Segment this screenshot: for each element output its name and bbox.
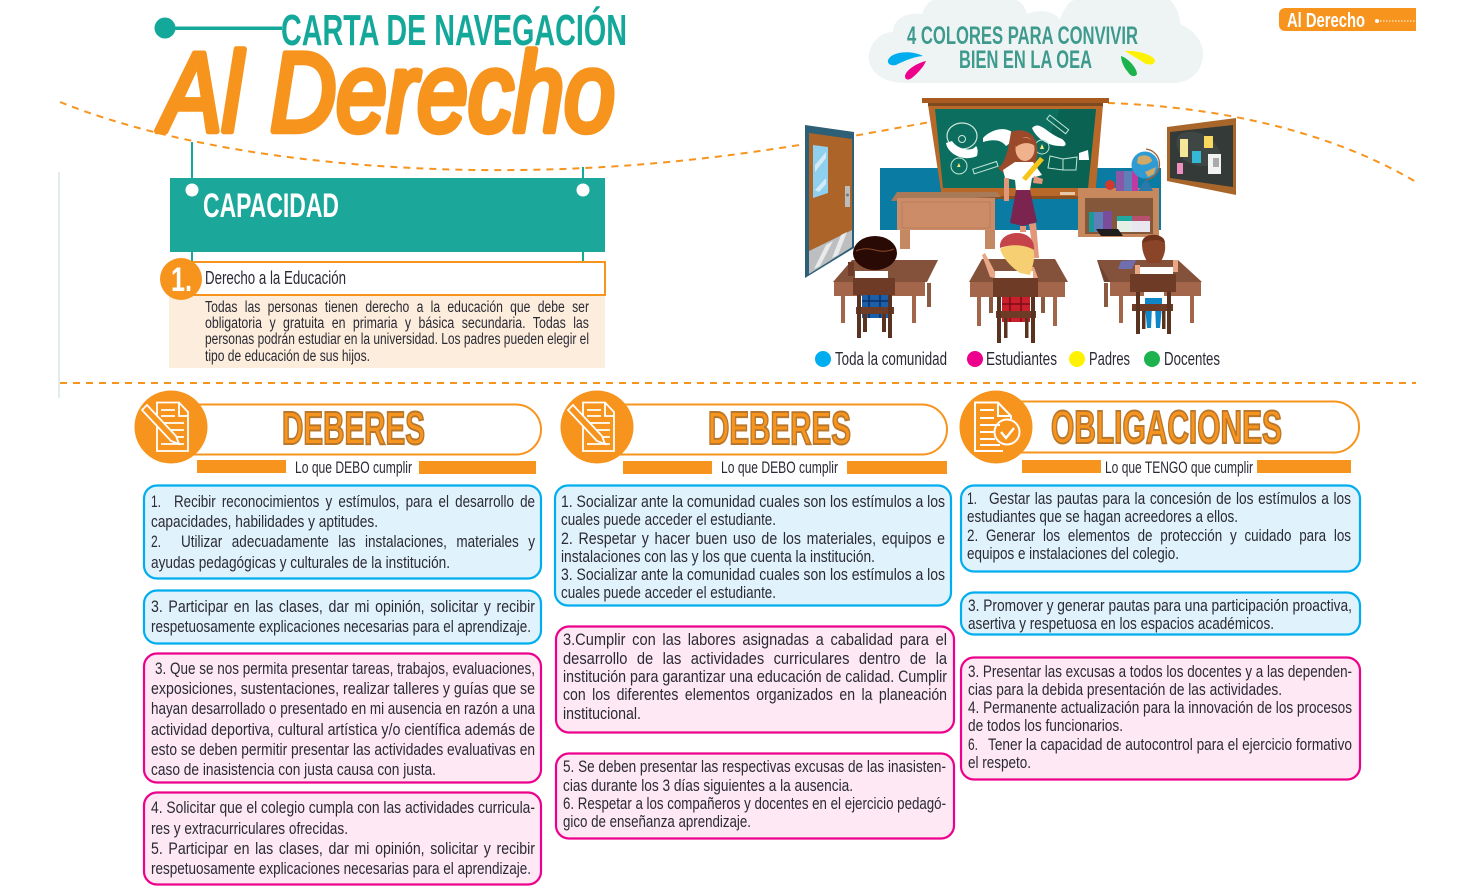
legend: Estudiantes xyxy=(986,349,1057,369)
icon: teacher xyxy=(998,130,1044,258)
callout: column 2 blue box duties 1-3: cuales puede acceder el estudiante. xyxy=(561,511,776,529)
tag: al derecho: Al Derecho xyxy=(1287,10,1365,32)
callout: column 1 pink box right 3 continued: exposiciones, sustentaciones, realizar talleres y guías que se xyxy=(151,680,535,698)
legend: Toda la comunidad xyxy=(835,349,947,369)
callout: column 1 blue box rights 1-2 xyxy=(144,486,541,578)
callout: column 1 pink box right 3 continued: hayan desarrollado o presentado en mi ausencia en razón a una xyxy=(151,700,536,718)
callout: column 2 pink box duties 5-6: 5. Se deben presentar las respectivas excusas de las inasisten- xyxy=(563,758,946,776)
callout: column 1 pink box right 3 continued: caso de inasistencia con justa causa con justa. xyxy=(151,761,436,779)
callout: column 3 pink box obligations 3-6: 6. xyxy=(968,736,978,754)
callout: column 1 blue box right 3 xyxy=(144,590,541,644)
callout: column 2 pink box duty 3: institucional. xyxy=(563,705,641,723)
legend xyxy=(815,349,1220,369)
legend: Docentes xyxy=(1164,349,1220,369)
callout: column 3 pink box obligations 3-6: el respeto. xyxy=(968,754,1031,772)
callout: column 2 blue box duties 1-3: instalaciones con las y los que cuenta la institución. xyxy=(561,548,875,566)
callout: column 1 blue box rights 1-2: 2. xyxy=(151,533,161,551)
callout: column 2 pink box duty 3 xyxy=(556,626,954,732)
callout: column 1 blue box right 3: 3. Participar en las clases, dar mi opinión, solicitar y recibir xyxy=(151,598,535,616)
illustration: classroom xyxy=(805,98,1236,343)
callout: column 2 pink box duty 3: institución para garantizar una educación de calidad. Cumplir xyxy=(563,668,947,686)
callout: column 2 pink box duty 3: 3.Cumplir con las labores asignadas a cabalidad para el xyxy=(563,631,947,649)
callout: column 1 pink box right 3 continued xyxy=(144,654,541,782)
icon: bookshelf and globe xyxy=(1078,149,1160,237)
callout: column 2 pink box duties 5-6: gico de enseñanza aprendizaje. xyxy=(563,813,751,831)
callout: column 2 pink box duties 5-6 xyxy=(556,754,954,838)
panel: capacidad: obligatoria y gratuita en primaria y básica secundaria. Todas las xyxy=(205,315,589,332)
callout: column 3 blue box obligation 3: 3. Promover y generar pautas para una participación proactiva, xyxy=(968,597,1352,615)
icon: teacher's desk xyxy=(891,192,1001,249)
callout: column 3 blue box obligations 1-2: 1. xyxy=(967,490,977,508)
panel heading: deberes column 2 xyxy=(560,390,947,477)
panel: capacidad: Derecho a la Educación xyxy=(205,268,346,288)
icon: chalkboard xyxy=(922,98,1109,199)
callout: column 3 pink box obligations 3-6: Tener la capacidad de autocontrol para el ejercicio formativo xyxy=(988,736,1352,754)
callout: column 2 blue box duties 1-3 xyxy=(555,486,951,606)
heading: 4 colores para convivir xyxy=(869,0,1203,83)
callout: column 1 pink box rights 4-5: res y extracurriculares ofrecidas. xyxy=(151,820,348,838)
heading: 4 colores para convivir: 4 COLORES PARA CONVIVIR xyxy=(907,22,1138,50)
panel heading: deberes column 1: Lo que DEBO cumplir xyxy=(295,459,412,477)
callout: column 3 blue box obligations 1-2: equipos e instalaciones del colegio. xyxy=(967,545,1179,563)
callout: column 2 pink box duties 5-6: cias durante los 3 días siguientes a la ausencia. xyxy=(563,777,853,795)
icon: document and pencil xyxy=(142,402,188,451)
panel: capacidad xyxy=(160,142,605,368)
title: carta de navegación al derecho xyxy=(154,5,627,155)
callout: column 3 pink box obligations 3-6: 4. Permanente actualización para la innovación de los procesos xyxy=(968,699,1352,717)
heading: 4 colores para convivir: BIEN EN LA OEA xyxy=(959,46,1092,74)
callout: column 3 blue box obligation 3 xyxy=(961,592,1360,634)
panel heading: deberes column 2: DEBERES xyxy=(708,402,851,454)
panel heading: obligaciones column 3: Lo que TENGO que cumplir xyxy=(1105,459,1253,477)
callout: column 3 pink box obligations 3-6: de todos los funcionarios. xyxy=(968,717,1123,735)
icon: document and pencil xyxy=(568,402,614,451)
panel heading: deberes column 2: Lo que DEBO cumplir xyxy=(721,459,838,477)
callout: column 1 blue box rights 1-2: Utilizar adecuadamente las instalaciones, materiales y xyxy=(181,533,536,551)
callout: column 3 pink box obligations 3-6: cias para la debida presentación de las actividades. xyxy=(968,681,1282,699)
panel heading: obligaciones column 3 xyxy=(960,390,1359,477)
callout: column 1 blue box right 3: respetuosamente explicaciones necesarias para el aprendizaje. xyxy=(151,618,531,636)
title: carta de navegación al derecho: CARTA DE NAVEGACIÓN xyxy=(281,5,627,55)
callout: column 1 pink box rights 4-5 xyxy=(144,792,541,884)
callout: column 2 blue box duties 1-3: 1. Socializar ante la comunidad cuales son los estímulos a los xyxy=(561,493,945,511)
callout: column 1 pink box rights 4-5: 5. Participar en las clases, dar mi opinión, solicitar y recibir xyxy=(151,840,535,858)
callout: column 1 blue box rights 1-2: Recibir reconocimientos y estímulos, para el desarrollo de xyxy=(174,493,535,511)
callout: column 1 blue box rights 1-2: 1. xyxy=(151,493,161,511)
callout: column 2 pink box duty 3: desarrollo de las actividades curriculares dentro de la xyxy=(563,650,948,668)
panel: capacidad: CAPACIDAD xyxy=(203,187,339,225)
callout: column 3 pink box obligations 3-6 xyxy=(961,658,1360,780)
callout: column 3 blue box obligations 1-2: 2. Generar los elementos de protección y cuidado para los xyxy=(967,527,1351,545)
title: carta de navegación al derecho: Al xyxy=(156,30,268,155)
callout: column 1 pink box right 3 continued: actividad deportiva, cultural artística y/o científica además de xyxy=(151,721,535,739)
callout: column 3 blue box obligations 1-2: Gestar las pautas para la concesión de los estímulos a los xyxy=(989,490,1351,508)
callout: column 1 blue box rights 1-2: capacidades, habilidades y aptitudes. xyxy=(151,513,378,531)
panel: capacidad: tipo de educación de sus hijos. xyxy=(205,348,370,365)
callout: column 3 blue box obligations 1-2 xyxy=(961,486,1360,572)
callout: column 2 blue box duties 1-3: 2. Respetar y hacer buen uso de los materiales, equipos e xyxy=(561,530,945,548)
callout: column 1 pink box right 3 continued: 3. Que se nos permita presentar tareas, trabajos, evaluaciones, xyxy=(155,660,535,678)
callout: column 3 blue box obligation 3: asertiva y respetuosa en los espacios académicos. xyxy=(968,615,1274,633)
panel heading: deberes column 1 xyxy=(134,390,541,477)
panel: capacidad: personas podrán estudiar en la universidad. Los padres pueden elegir el xyxy=(205,331,589,348)
callout: column 1 pink box right 3 continued: esto se deben permitir presentar las actividades evaluativas en xyxy=(151,741,535,759)
icon: document with check xyxy=(975,402,1020,451)
title: carta de navegación al derecho: Derecho xyxy=(270,30,615,155)
icon: door xyxy=(805,125,854,278)
callout: column 3 pink box obligations 3-6: 3. Presentar las excusas a todos los docentes y a las dependen- xyxy=(968,663,1352,681)
icon: student desk middle xyxy=(969,233,1068,343)
icon: student desk left xyxy=(833,236,938,338)
callout: column 1 pink box rights 4-5: respetuosamente explicaciones necesarias para el aprendizaje. xyxy=(151,860,531,878)
panel: capacidad: 1. xyxy=(171,261,192,299)
panel heading: deberes column 1: DEBERES xyxy=(282,402,425,454)
callout: column 1 blue box rights 1-2: ayudas pedagógicas y culturales de la institución. xyxy=(151,554,450,572)
callout: column 1 pink box rights 4-5: 4. Solicitar que el colegio cumpla con las actividades curricula- xyxy=(151,799,535,817)
callout: column 2 pink box duty 3: con los diferentes elementos organizados en la planeación xyxy=(563,686,947,704)
callout: column 2 blue box duties 1-3: 3. Socializar ante la comunidad cuales son los estímulos a los xyxy=(561,566,945,584)
panel: capacidad: Todas las personas tienen derecho a la educación que debe ser xyxy=(205,299,589,316)
callout: column 3 blue box obligations 1-2: estudiantes que se hagan acreedores a ellos. xyxy=(967,508,1238,526)
callout: column 2 pink box duties 5-6: 6. Respetar a los compañeros y docentes en el ejercicio pedagó- xyxy=(563,795,946,813)
icon: cork board xyxy=(1167,118,1236,195)
callout: column 2 blue box duties 1-3: cuales puede acceder el estudiante. xyxy=(561,584,776,602)
panel heading: obligaciones column 3: OBLIGACIONES xyxy=(1051,401,1282,453)
icon: student desk right xyxy=(1097,235,1202,334)
legend: Padres xyxy=(1089,349,1130,369)
